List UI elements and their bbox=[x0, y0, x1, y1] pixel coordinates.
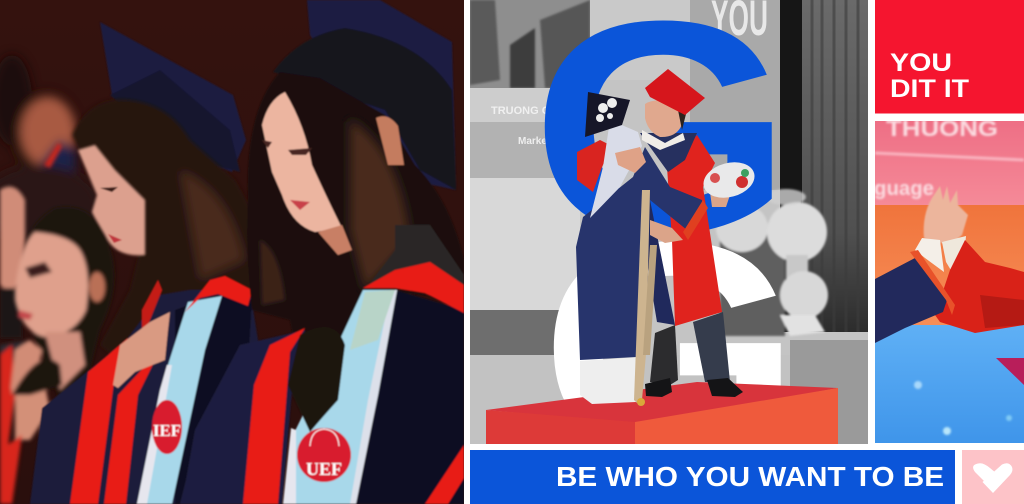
icon: heart bbox=[973, 463, 1012, 493]
crutch bbox=[634, 190, 650, 403]
hair bbox=[247, 72, 464, 338]
platform bbox=[486, 382, 838, 444]
stage background bbox=[580, 80, 868, 355]
cap bbox=[100, 22, 246, 172]
red collar bbox=[363, 262, 464, 313]
red sleeve bbox=[935, 240, 1024, 333]
slogan banner bbox=[470, 450, 955, 504]
third graduate bbox=[0, 207, 114, 504]
blurred screen text: THUONG bbox=[886, 116, 998, 141]
badge bbox=[152, 400, 182, 454]
curtains bbox=[780, 0, 802, 332]
photo: hug on stage with big G letters: TRUONG GIA X bbox=[491, 105, 572, 117]
collar bbox=[185, 276, 252, 312]
blurred screen text: guage bbox=[874, 178, 934, 200]
hair bbox=[70, 98, 250, 354]
woman bbox=[576, 92, 708, 406]
shirt cuffs bbox=[915, 238, 944, 272]
face bbox=[262, 92, 342, 232]
navy sleeve bbox=[875, 258, 947, 343]
neck bbox=[318, 225, 352, 255]
pink logo tile with heart icon bbox=[962, 450, 1024, 504]
red band bbox=[243, 328, 305, 504]
red bands bbox=[70, 338, 128, 504]
bouquet bbox=[699, 157, 759, 207]
lips bbox=[290, 200, 310, 210]
hand bbox=[113, 312, 170, 388]
flowers bbox=[716, 189, 828, 336]
slogan text: BE WHO YOU WANT TO BE bbox=[556, 461, 944, 492]
face bbox=[78, 145, 145, 255]
blurred screen text bbox=[874, 116, 1024, 200]
badge: IEF bbox=[153, 421, 181, 440]
UEF badge: UEF bbox=[306, 459, 342, 479]
red panel: You did it bbox=[875, 0, 1024, 114]
far background people bbox=[0, 55, 100, 245]
heading: DIT IT bbox=[890, 75, 969, 103]
photo: hug on stage with big G letters bbox=[470, 0, 868, 444]
ear bbox=[376, 116, 404, 165]
hair over sash bbox=[288, 327, 345, 432]
second graduate bbox=[30, 22, 272, 504]
bottom right red bbox=[425, 445, 464, 504]
robe bbox=[180, 330, 305, 504]
man bbox=[640, 69, 743, 397]
YOU banner bbox=[690, 0, 782, 190]
eyes bbox=[288, 148, 312, 155]
photo: hug on stage with big G letters: Marketin bbox=[518, 136, 559, 147]
hands bbox=[924, 186, 968, 245]
cap bbox=[307, 0, 456, 190]
photo: high five bbox=[874, 116, 1024, 443]
red folder bbox=[996, 358, 1024, 385]
photo: graduates with hands on hearts bbox=[0, 0, 464, 504]
sash bbox=[137, 296, 222, 504]
sash bbox=[285, 290, 397, 504]
head wrap bbox=[273, 28, 456, 190]
lights bbox=[914, 381, 922, 389]
heading: YOU bbox=[890, 49, 952, 77]
first graduate bbox=[180, 0, 464, 504]
robe bbox=[30, 290, 258, 504]
UEF badge bbox=[297, 428, 351, 482]
